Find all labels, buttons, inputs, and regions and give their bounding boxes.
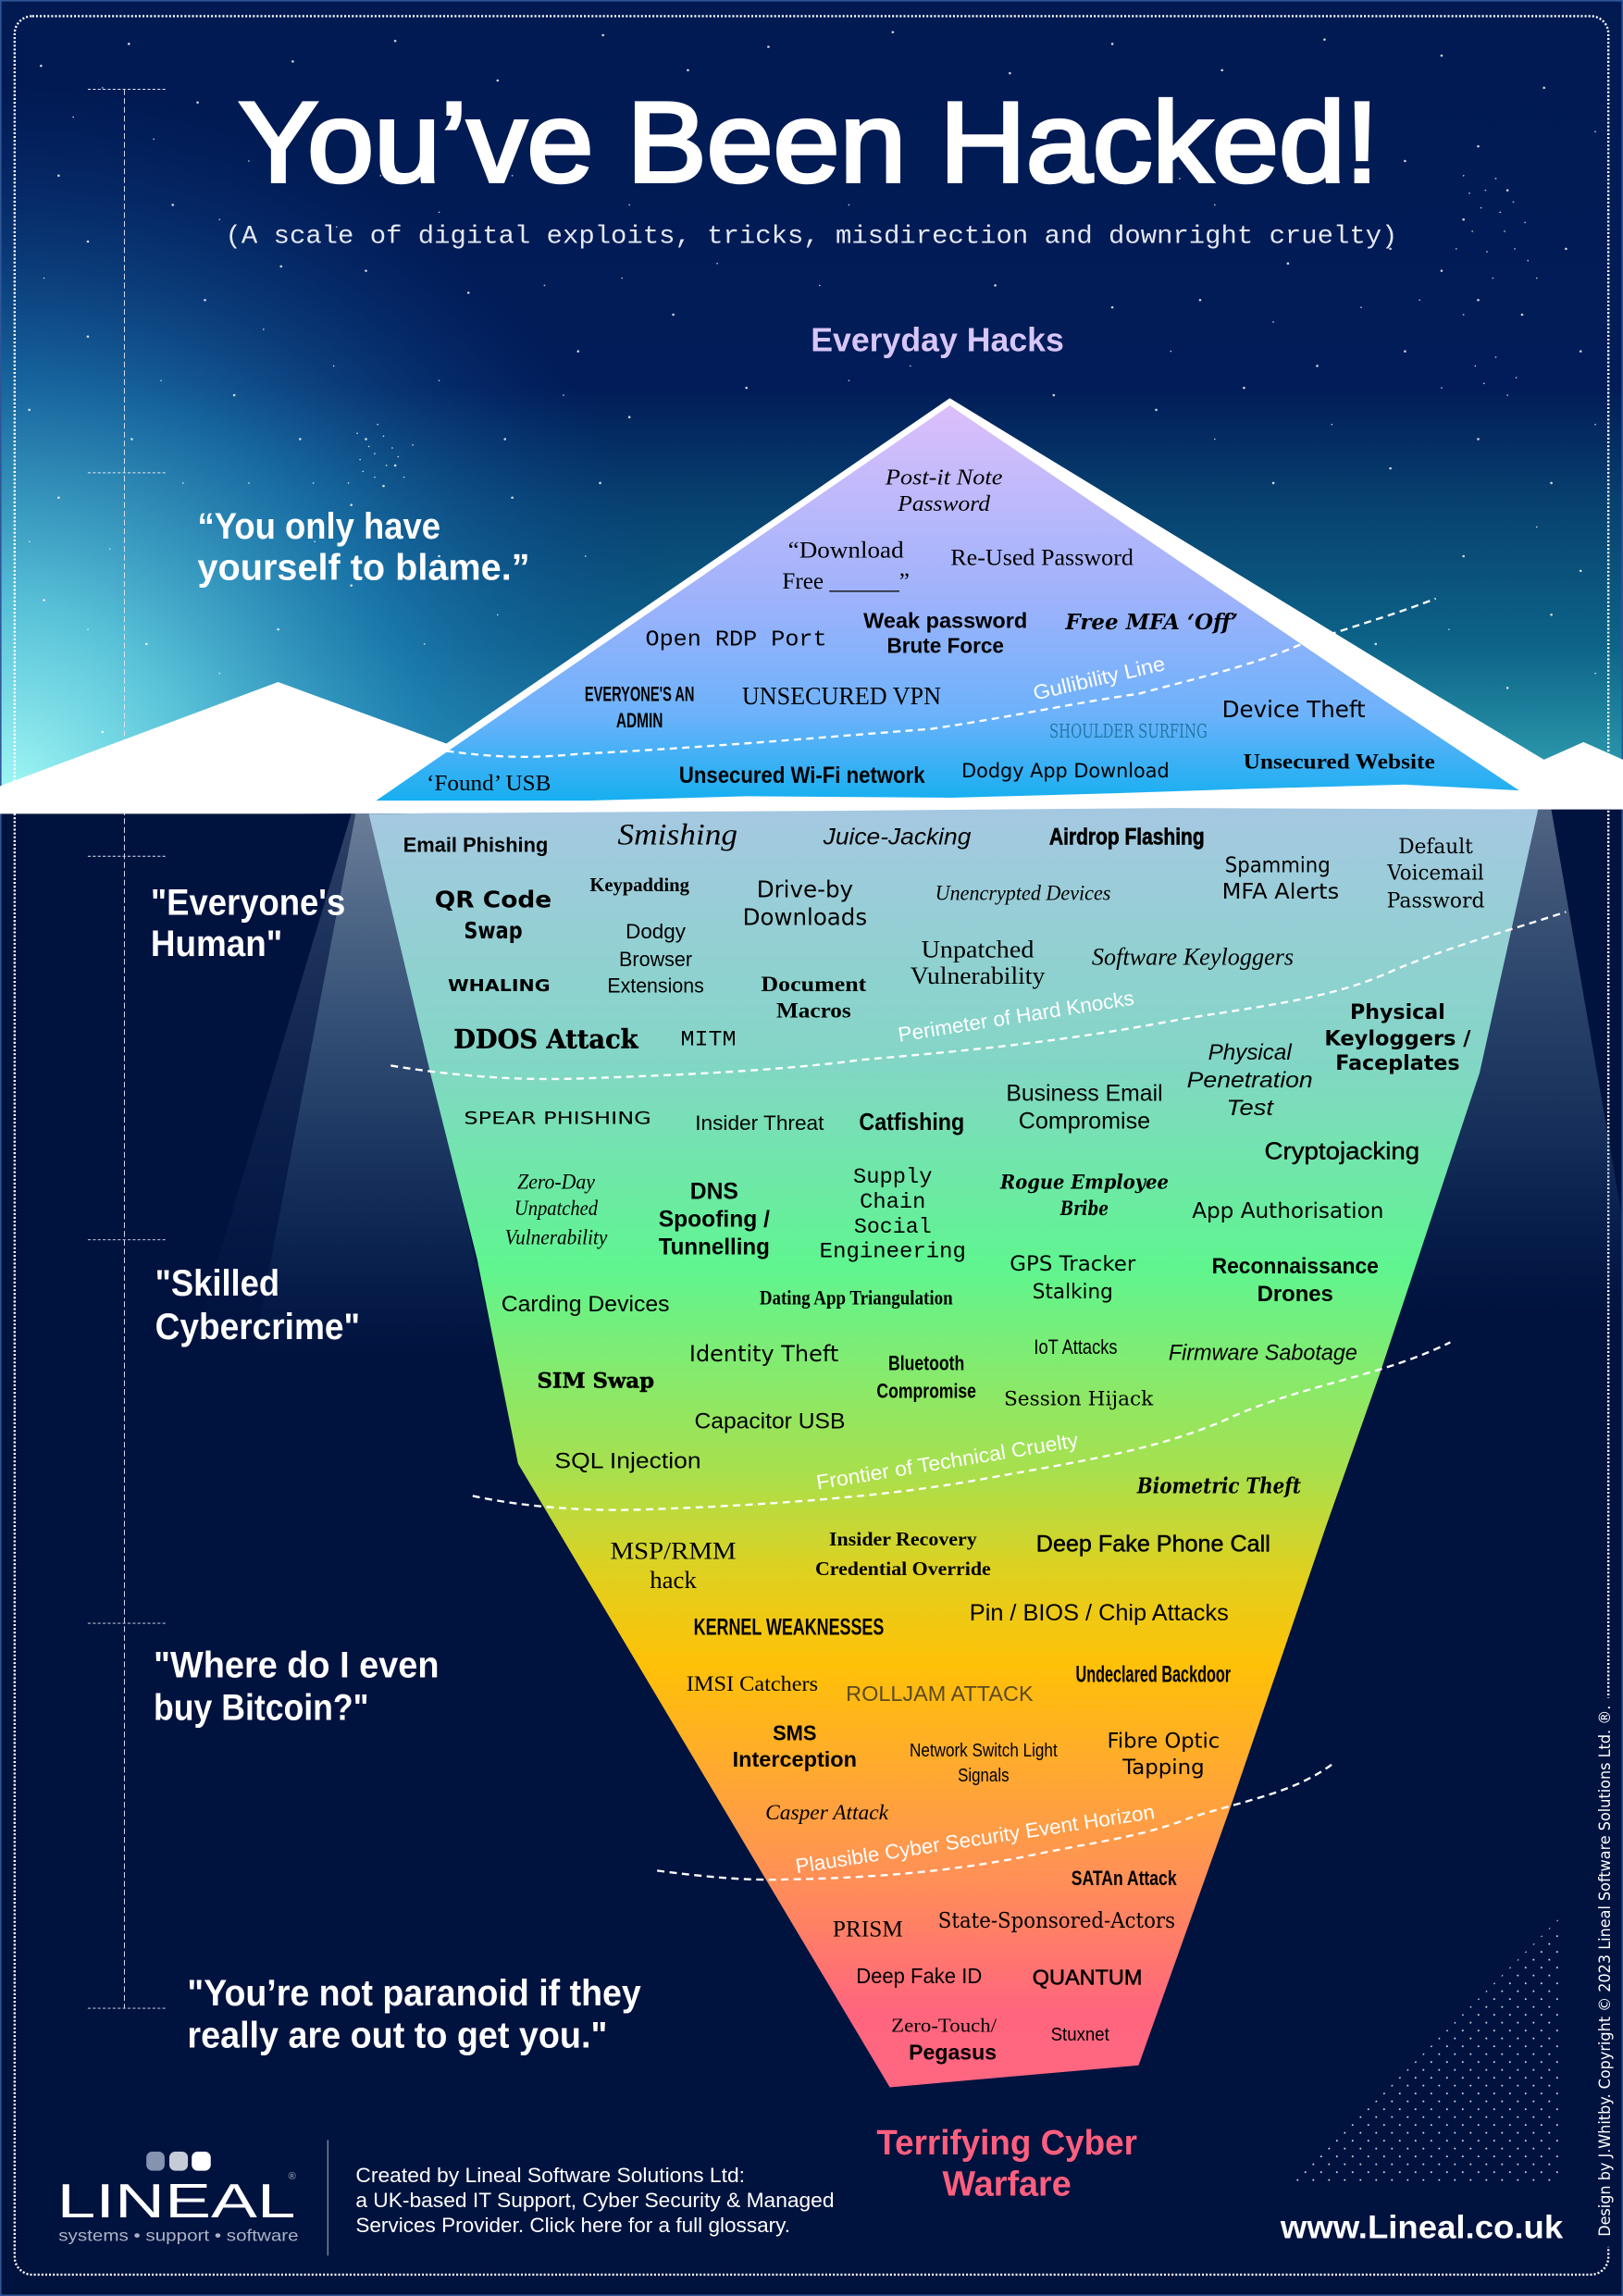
- item: deep fake id: Deep Fake ID: [856, 1964, 982, 1988]
- item: pin bios chip attacks: Pin / BIOS / Chip Attacks: [970, 1601, 1229, 1626]
- item: everyone's an admin: ADMIN: [616, 709, 663, 732]
- item: bluetooth compromise: Bluetooth: [888, 1351, 964, 1374]
- quote: skilled cybercrime: Cybercrime": [155, 1307, 360, 1347]
- underwater light beams: [187, 810, 1623, 1361]
- item: insider recovery credential override: Credential Override: [815, 1559, 991, 1580]
- item: dns spoofing tunnelling: DNS: [690, 1179, 738, 1204]
- heading: terrifying cyber warfare: [876, 2124, 1137, 2203]
- panel: where do I even buy bitcoin labels: [611, 1473, 1301, 1878]
- quote: yourself to blame: “You only have: [198, 506, 440, 547]
- item: casper attack: Casper Attack: [765, 1801, 888, 1825]
- item: qr code swap: Swap: [464, 917, 523, 944]
- heading: terrifying cyber warfare: Warfare: [943, 2165, 1072, 2203]
- item: gps tracker stalking: [1010, 1252, 1136, 1304]
- subtitle: (A scale of digital exploits, tricks, misdirection and downright cruelty): [226, 223, 1397, 252]
- item: default voicemail password: Voicemail: [1386, 862, 1484, 886]
- item: catfishing: Catfishing: [859, 1108, 964, 1136]
- item: software keyloggers: Software Keyloggers: [1092, 942, 1294, 970]
- quote: yourself to blame: yourself to blame.”: [198, 547, 530, 588]
- quote: everyone's human: Human": [151, 924, 282, 964]
- item: found usb: ‘Found’ USB: [427, 771, 551, 796]
- item: insider recovery credential override: Insider Recovery: [829, 1530, 977, 1550]
- item: identity theft: Identity Theft: [689, 1341, 838, 1367]
- item: rogue employee bribe: Bribe: [1059, 1198, 1109, 1221]
- item: capacitor usb: Capacitor USB: [694, 1410, 845, 1434]
- item: insider recovery credential override: [815, 1530, 991, 1580]
- item: dodgy browser extensions: Browser: [619, 948, 692, 971]
- item: unencrypted devices: Unencrypted Devices: [935, 882, 1110, 906]
- item: bluetooth compromise: [876, 1351, 976, 1402]
- item: dodgy browser extensions: Extensions: [607, 974, 704, 997]
- item: fibre optic tapping: Tapping: [1121, 1756, 1205, 1780]
- item: physical penetration test: Test: [1226, 1097, 1275, 1121]
- item: airdrop flashing: Airdrop Flashing: [1049, 825, 1205, 850]
- logo registered mark: ®: [289, 2171, 296, 2182]
- item: bluetooth compromise: Compromise: [876, 1379, 976, 1402]
- item: app authorisation: App Authorisation: [1192, 1199, 1383, 1223]
- item: zero-touch pegasus: Pegasus: [909, 2040, 997, 2064]
- quote: not paranoid: "You’re not paranoid if they: [187, 1973, 641, 2014]
- item: cryptojacking: Cryptojacking: [1265, 1137, 1419, 1165]
- quote: where do I even buy bitcoin: [154, 1645, 439, 1728]
- item: firmware sabotage: Firmware Sabotage: [1169, 1341, 1357, 1365]
- item: free mfa off: Free MFA ‘Off’: [1064, 609, 1238, 635]
- item: business email compromise: Business Email: [1006, 1081, 1163, 1106]
- label: plausible cyber security event horizon: Plausible Cyber Security Event Horizon: [794, 1800, 1157, 1878]
- panel: skilled cybercrime labels: [464, 1000, 1471, 1494]
- item: document macros: [761, 973, 866, 1023]
- logo tagline: systems • support • software: [58, 2227, 299, 2245]
- creator text block: [355, 2164, 835, 2237]
- item: msp/rmm hack: hack: [650, 1567, 698, 1594]
- quote: everyone's human: "Everyone's: [151, 883, 345, 924]
- item: network switch light signals: [910, 1740, 1058, 1786]
- panel: everyone's human labels: [403, 818, 1485, 1054]
- item: document macros: Document: [761, 973, 866, 997]
- item: fibre optic tapping: Fibre Optic: [1107, 1730, 1220, 1754]
- item: mitm: MITM: [680, 1027, 737, 1051]
- item: download free: [782, 538, 910, 594]
- item: keypadding: Keypadding: [589, 874, 689, 896]
- quote: not paranoid: [187, 1973, 641, 2056]
- item: spamming mfa alerts: [1222, 854, 1339, 904]
- item: ddos attack: DDOS Attack: [453, 1024, 638, 1054]
- item: msp/rmm hack: MSP/RMM: [611, 1537, 737, 1564]
- item: business email compromise: Compromise: [1019, 1109, 1150, 1134]
- item: biometric theft: Biometric Theft: [1136, 1473, 1301, 1498]
- item: default voicemail password: [1386, 835, 1485, 913]
- item: sms interception: Interception: [733, 1747, 857, 1771]
- item: physical keyloggers faceplates: Keyloggers /: [1324, 1026, 1471, 1050]
- item: physical penetration test: Penetration: [1187, 1069, 1313, 1093]
- item: zero-day unpatched vulnerability: Zero-Day: [517, 1170, 596, 1193]
- item: fibre optic tapping: [1107, 1730, 1220, 1780]
- item: shoulder surfing: SHOULDER SURFING: [1049, 720, 1208, 742]
- item: post-it note password: [885, 465, 1003, 516]
- creator text block: Created by Lineal Software Solutions Ltd:: [355, 2164, 745, 2187]
- item: dating app triangulation: Dating App Triangulation: [760, 1285, 953, 1309]
- logo wordmark: LINEAL: [57, 2175, 295, 2228]
- item: sim swap: SIM Swap: [537, 1369, 654, 1393]
- item: unpatched vulnerability: Vulnerability: [911, 962, 1046, 989]
- item: smishing: Smishing: [617, 818, 737, 852]
- item: open rdp port: Open RDP Port: [645, 628, 827, 653]
- item: network switch light signals: Signals: [958, 1765, 1010, 1786]
- item: whaling: WHALING: [448, 976, 551, 996]
- item: state-sponsored-actors: State-Sponsored-Actors: [938, 1909, 1175, 1933]
- item: qr code swap: [435, 887, 551, 944]
- item: post-it note password: Password: [897, 491, 991, 516]
- item: gps tracker stalking: GPS Tracker: [1010, 1252, 1136, 1276]
- item: rogue employee bribe: Rogue Employee: [999, 1171, 1169, 1194]
- item: weak password brute force: [863, 609, 1027, 657]
- divider: [327, 2140, 328, 2255]
- stars: [30, 32, 1595, 732]
- item: weak password brute force: Brute Force: [886, 633, 1004, 657]
- item: insider threat: Insider Threat: [695, 1111, 824, 1135]
- item: drive-by downloads: [743, 876, 867, 931]
- item: reconnaissance drones: Reconnaissance: [1212, 1255, 1379, 1279]
- item: default voicemail password: Default: [1398, 835, 1473, 859]
- item: juice-jacking: Juice-Jacking: [823, 825, 972, 850]
- item: document macros: Macros: [776, 999, 851, 1023]
- item: physical keyloggers faceplates: Faceplates: [1335, 1051, 1460, 1075]
- scale ruler on the left: [88, 89, 166, 2008]
- white snow land and mountains: [0, 398, 1623, 813]
- item: spamming mfa alerts: MFA Alerts: [1222, 880, 1339, 904]
- label: frontier of technical cruelty: Frontier of Technical Cruelty: [814, 1428, 1081, 1494]
- item: msp/rmm hack: [611, 1537, 737, 1594]
- logo: lineal: [57, 2152, 299, 2245]
- item: unpatched vulnerability: [911, 935, 1046, 989]
- item: sms interception: [733, 1721, 857, 1771]
- item: unsecured website: Unsecured Website: [1244, 750, 1435, 774]
- quote: everyone's human: [151, 883, 345, 964]
- label: gullibility line: Gullibility Line: [1031, 652, 1167, 704]
- item: stuxnet: Stuxnet: [1051, 2024, 1109, 2045]
- heading: terrifying cyber warfare: Terrifying Cyber: [876, 2124, 1137, 2163]
- item: business email compromise: [1006, 1081, 1163, 1134]
- item: zero-day unpatched vulnerability: Unpatched: [514, 1197, 599, 1220]
- title: You’ve Been Hacked!: [239, 79, 1379, 206]
- item: sql injection: SQL Injection: [554, 1449, 701, 1473]
- quote: skilled cybercrime: "Skilled: [155, 1263, 279, 1304]
- item: dns spoofing tunnelling: Tunnelling: [659, 1235, 770, 1260]
- quote: skilled cybercrime: [155, 1263, 360, 1347]
- item: device theft: Device Theft: [1222, 696, 1366, 723]
- item: gps tracker stalking: Stalking: [1033, 1280, 1113, 1304]
- item: sms interception: SMS: [773, 1721, 817, 1745]
- item: zero-day unpatched vulnerability: Vulnerability: [505, 1225, 608, 1248]
- item: iot attacks: IoT Attacks: [1034, 1335, 1118, 1359]
- item: physical penetration test: [1187, 1041, 1313, 1121]
- item: prism: PRISM: [833, 1917, 903, 1942]
- item: drive-by downloads: Drive-by: [757, 876, 853, 903]
- logo pills: [146, 2152, 211, 2171]
- item: satan attack: SATAn Attack: [1072, 1867, 1177, 1890]
- item: rolljam attack: ROLLJAM ATTACK: [846, 1682, 1034, 1706]
- item: post-it note password: Post-it Note: [885, 465, 1003, 490]
- creator text block: a UK-based IT Support, Cyber Security & Managed: [355, 2189, 835, 2212]
- item: everyone's an admin: [585, 683, 694, 732]
- item: supply chain social engineering: [820, 1165, 966, 1264]
- creator text block: Services Provider. Click here for a full glossary.: [355, 2214, 790, 2237]
- item: supply chain social engineering: Chain: [860, 1190, 925, 1214]
- item: supply chain social engineering: Engineering: [820, 1240, 966, 1264]
- item: network switch light signals: Network Switch Light: [910, 1740, 1058, 1761]
- submerged iceberg gradient: [369, 808, 1538, 2087]
- item: spear phishing: SPEAR PHISHING: [464, 1109, 651, 1129]
- copyright vertical text: Design by J.Whitby. Copyright © 2023 Lineal Software Solutions Ltd. ®.: [1596, 1706, 1614, 2237]
- item: reconnaissance drones: Drones: [1258, 1283, 1333, 1307]
- item: dodgy app download: Dodgy App Download: [961, 760, 1170, 783]
- item: drive-by downloads: Downloads: [743, 904, 867, 931]
- label: perimeter of hard knocks: Perimeter of Hard Knocks: [897, 987, 1135, 1047]
- item: email phishing: Email Phishing: [403, 834, 548, 857]
- item: rogue employee bribe: [999, 1171, 1169, 1221]
- item: kernel weaknesses: KERNEL WEAKNESSES: [694, 1616, 884, 1641]
- item: session hijack: Session Hijack: [1004, 1387, 1154, 1410]
- item: physical keyloggers faceplates: Physical: [1350, 1000, 1445, 1024]
- quote: not paranoid: really are out to get you.": [187, 2016, 607, 2056]
- item: weak password brute force: Weak password: [863, 609, 1027, 633]
- panel: terrifying cyber warfare labels: [833, 1867, 1177, 2064]
- item: unsecured vpn: UNSECURED VPN: [742, 681, 941, 710]
- item: physical keyloggers faceplates: [1324, 1000, 1471, 1075]
- item: everyone's an admin: EVERYONE'S AN: [585, 683, 694, 706]
- item: supply chain social engineering: Social: [854, 1215, 932, 1239]
- panel: everyday hacks labels: [427, 465, 1435, 796]
- item: spamming mfa alerts: Spamming: [1225, 854, 1331, 878]
- item: supply chain social engineering: Supply: [853, 1165, 932, 1189]
- item: undeclared backdoor: Undeclared Backdoor: [1075, 1662, 1231, 1687]
- item: zero-touch pegasus: Zero-Touch/: [891, 2014, 997, 2036]
- heading: Everyday Hacks: Everyday Hacks: [811, 321, 1064, 359]
- item: dns spoofing tunnelling: [659, 1179, 770, 1260]
- website url: www.Lineal.co.uk: [1280, 2210, 1564, 2245]
- item: default voicemail password: Password: [1387, 889, 1485, 913]
- quote: yourself to blame: [198, 506, 530, 588]
- item: unsecured wi-fi network: Unsecured Wi-Fi network: [679, 763, 925, 788]
- quote: where do I even buy bitcoin: "Where do I even: [154, 1645, 439, 1686]
- item: imsi catchers: IMSI Catchers: [687, 1672, 818, 1696]
- item: re-used password: Re-Used Password: [950, 545, 1134, 571]
- dashed threshold lines: [390, 599, 1566, 1880]
- item: dns spoofing tunnelling: Spoofing /: [659, 1207, 770, 1232]
- item: deep fake phone call: Deep Fake Phone Call: [1036, 1532, 1270, 1558]
- item: zero-touch pegasus: [891, 2014, 997, 2064]
- dotted triangle decoration: [1293, 1916, 1562, 2184]
- item: unpatched vulnerability: Unpatched: [922, 935, 1035, 962]
- item: quantum: QUANTUM: [1033, 1966, 1142, 1990]
- item: dodgy browser extensions: Dodgy: [626, 920, 687, 943]
- item: carding devices: Carding Devices: [502, 1293, 670, 1317]
- item: download free: Free ______”: [782, 568, 910, 594]
- item: dodgy browser extensions: [607, 920, 704, 997]
- item: qr code swap: QR Code: [435, 887, 551, 913]
- item: physical penetration test: Physical: [1208, 1041, 1293, 1065]
- item: reconnaissance drones: [1212, 1255, 1379, 1307]
- item: download free: “Download: [788, 538, 904, 564]
- quote: where do I even buy bitcoin: buy Bitcoin?": [154, 1687, 369, 1728]
- iceberg tip gradient: [376, 405, 1519, 800]
- item: zero-day unpatched vulnerability: [505, 1170, 608, 1248]
